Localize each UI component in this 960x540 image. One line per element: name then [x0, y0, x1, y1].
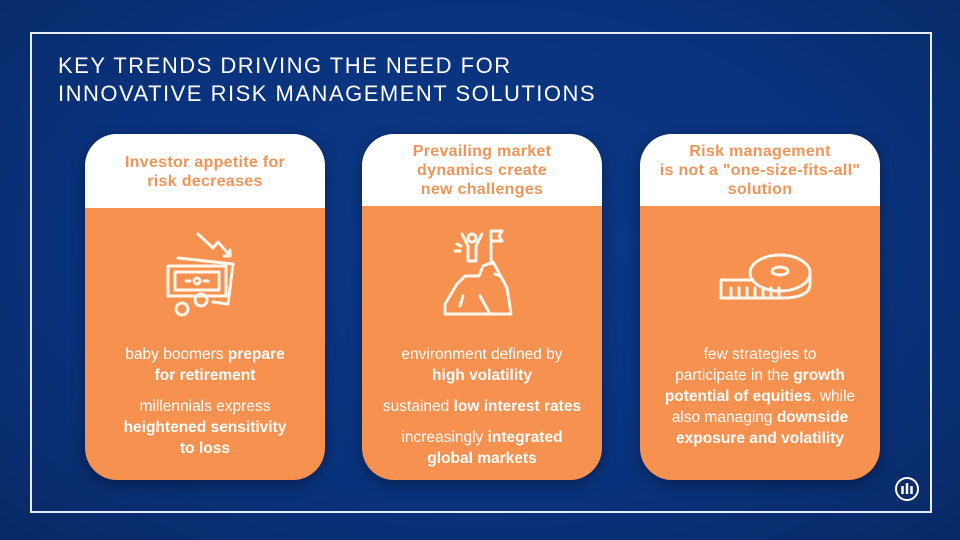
- text: participate in the growth: [675, 367, 845, 384]
- heading: new challenges: [421, 180, 543, 198]
- title: [58, 53, 596, 106]
- icon: logo: [895, 477, 919, 501]
- text: sustained low interest rates: [383, 398, 581, 415]
- heading: solution: [728, 180, 792, 198]
- heading: Prevailing market: [413, 142, 551, 160]
- heading: Investor appetite for: [125, 154, 285, 171]
- text: [383, 346, 581, 467]
- text: millennials express: [140, 398, 270, 415]
- text: [665, 346, 855, 447]
- text: baby boomers prepare: [125, 346, 285, 363]
- text: increasingly integrated: [401, 429, 563, 446]
- heading: [640, 134, 880, 206]
- heading: [85, 134, 325, 208]
- icon: money down: [166, 232, 234, 316]
- title: INNOVATIVE RISK MANAGEMENT SOLUTIONS: [58, 81, 596, 106]
- heading: risk decreases: [147, 173, 263, 190]
- text: also managing downside: [672, 409, 848, 426]
- text: few strategies to: [704, 346, 816, 363]
- text: high volatility: [432, 367, 532, 384]
- heading: is not a "one-size-fits-all": [660, 162, 860, 178]
- heading: dynamics create: [417, 162, 547, 178]
- text: exposure and volatility: [676, 430, 844, 447]
- text: to loss: [180, 440, 230, 457]
- icon: mountain: [444, 230, 512, 316]
- panel: one size fits all: [640, 134, 880, 480]
- text: for retirement: [155, 367, 255, 384]
- text: heightened sensitivity: [124, 419, 286, 436]
- text: [124, 346, 286, 457]
- panel: market dynamics: [362, 134, 602, 480]
- text: global markets: [427, 450, 537, 467]
- heading: [362, 134, 602, 206]
- title: KEY TRENDS DRIVING THE NEED FOR: [58, 53, 512, 78]
- heading: Risk management: [689, 142, 831, 160]
- panel: investor appetite: [85, 134, 325, 480]
- text: potential of equities, while: [665, 388, 855, 405]
- text: environment defined by: [401, 346, 563, 363]
- icon: measuring tape: [720, 254, 812, 300]
